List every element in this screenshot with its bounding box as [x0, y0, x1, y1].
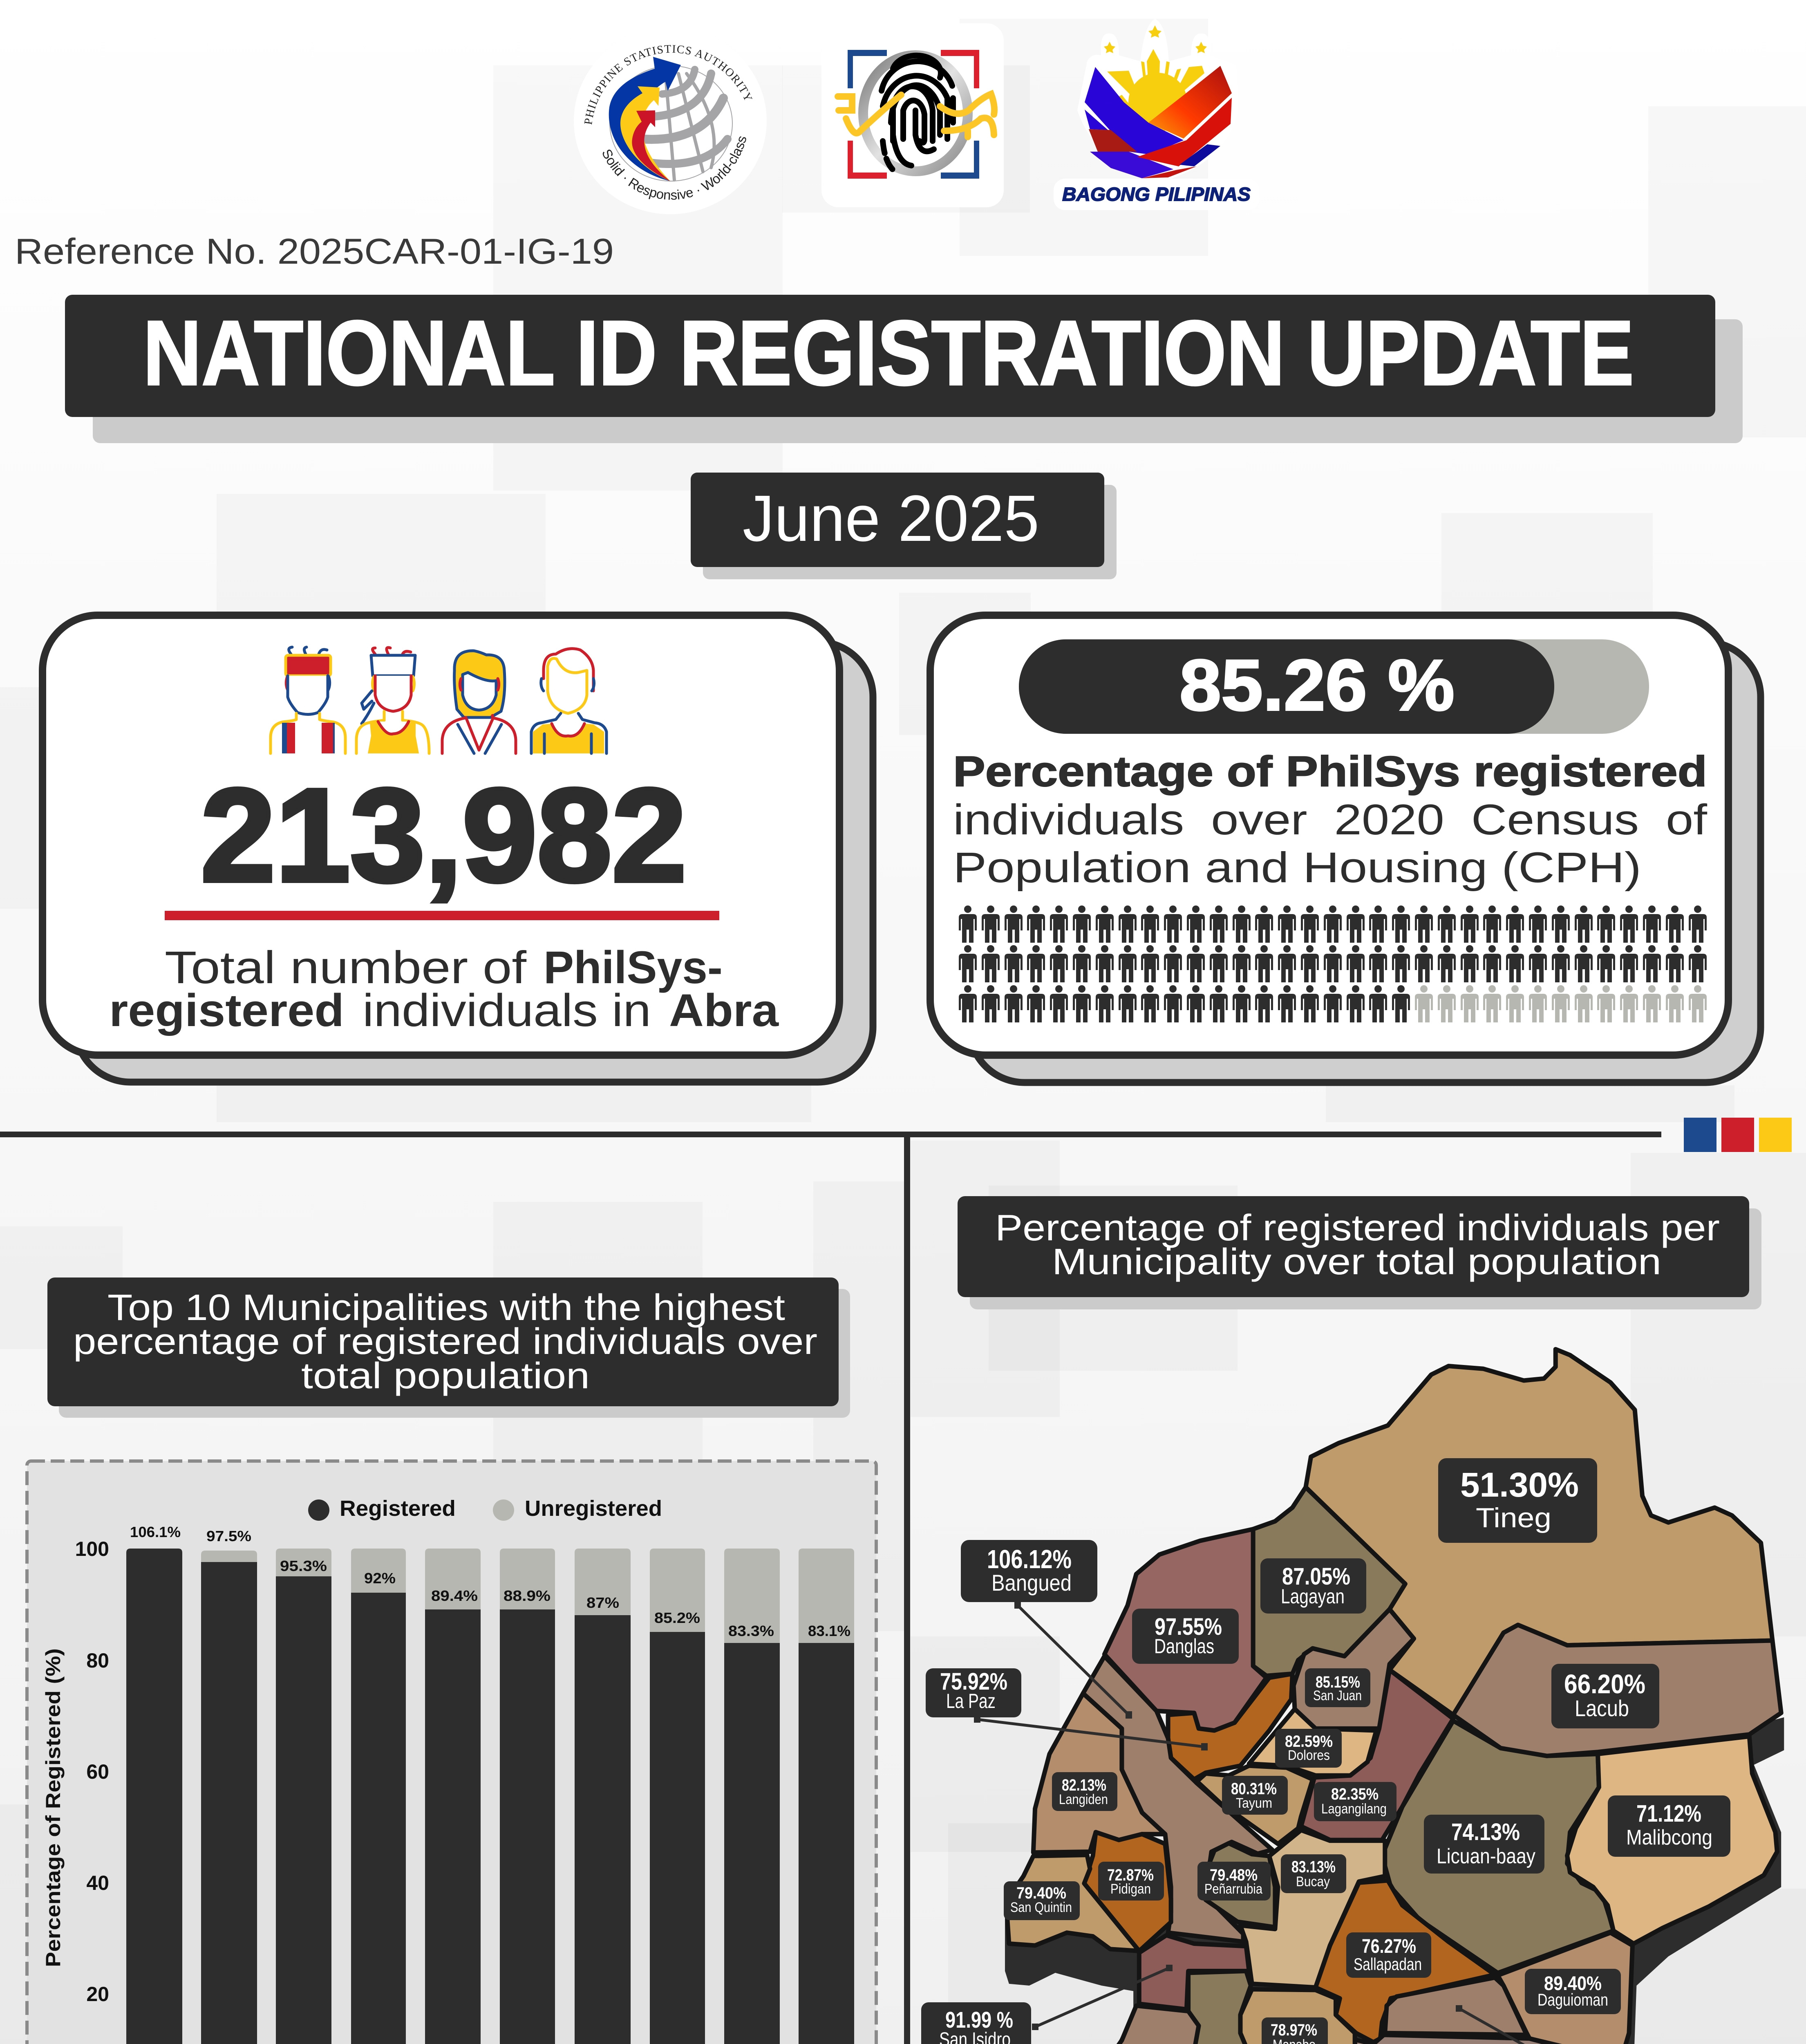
logo: Philippine Statistics Authority	[574, 28, 767, 214]
title banner	[65, 295, 1743, 443]
label: Daguioman: 89.40%	[1544, 1973, 1602, 1995]
southern municipalities	[1006, 1830, 1632, 2044]
label: Manabo: 78.97%	[1271, 2021, 1317, 2039]
region: Bucloc	[1385, 1978, 1526, 2035]
label: Manabo	[1262, 2017, 1328, 2044]
label: Licuan-Baay: Licuan-baay	[1437, 1845, 1535, 1868]
region: Sallapadan	[1316, 1880, 1495, 2042]
label: Daguioman	[1525, 1969, 1621, 2014]
label: Tineg: 51.30%	[1460, 1466, 1579, 1504]
panel: percentage registered	[930, 615, 1761, 1083]
region: Peñarrubia	[1206, 1843, 1275, 1927]
label: San Juan: San Juan	[1313, 1688, 1362, 1703]
label: Tayum	[1222, 1776, 1288, 1815]
label: Langiden	[1052, 1772, 1117, 1811]
map: Abra municipalities	[1005, 1349, 1784, 2044]
panel: total registered	[43, 615, 873, 1082]
region: Villaviciosa	[1154, 1971, 1255, 2044]
caption: total number	[109, 942, 779, 1036]
y axis	[75, 1537, 109, 2044]
label: San Quintin: 79.40%	[1016, 1884, 1066, 1902]
label: Sallapadan	[1346, 1932, 1431, 1978]
label: Dolores	[1275, 1729, 1342, 1768]
label: Malibcong: 71.12%	[1636, 1800, 1701, 1827]
label: Sallapadan: 76.27%	[1362, 1936, 1416, 1957]
logo: PhilSys fingerprint	[821, 23, 1004, 207]
caption: total number: Total number of	[165, 942, 527, 993]
label: Lacub: 66.20%	[1564, 1669, 1645, 1699]
region: Bucay	[1240, 1830, 1385, 1988]
progress pill: 85.26 %	[1019, 639, 1649, 734]
label: Licuan-Baay	[1424, 1815, 1544, 1874]
region: Lacub	[1453, 1625, 1781, 1756]
title banner: NATIONAL ID REGISTRATION UPDATE	[143, 301, 1634, 404]
value labels: 85.2%	[654, 1609, 700, 1626]
statistic: 213,982: 213,982	[201, 761, 687, 909]
date badge	[691, 473, 1117, 579]
label: Danglas	[1132, 1609, 1239, 1664]
logo: Philippine Statistics Authority: PHILIPPINE STATISTICS AUTHORITY	[582, 43, 755, 126]
label: Bangued: Bangued	[991, 1570, 1072, 1596]
heading: percentage per municipality	[958, 1196, 1761, 1309]
value labels: 106.1%	[130, 1524, 181, 1540]
label: Peñarrubia	[1197, 1862, 1271, 1901]
label: San Isidro: 91.99 %	[945, 2007, 1013, 2033]
description text: Percentage of PhilSys registered	[953, 748, 1707, 796]
label: Pidigan: Pidigan	[1110, 1881, 1151, 1897]
label: Bangued: 106.12%	[987, 1544, 1072, 1574]
label: San Isidro	[921, 2002, 1031, 2044]
caption: total number: Abra	[669, 985, 779, 1036]
heading: percentage per municipality: Percentage of registered individuals per	[995, 1208, 1720, 1248]
description text	[953, 748, 1708, 892]
value labels: 97.5%	[206, 1528, 251, 1544]
heading: top 10 municipalities	[47, 1278, 850, 1418]
description text: Population and Housing (CPH)	[953, 844, 1641, 892]
color squares	[1684, 1118, 1792, 1152]
label: Tayum: 80.31%	[1231, 1780, 1277, 1798]
y axis: 20	[86, 1983, 109, 2006]
label: Langiden: 82.13%	[1062, 1776, 1106, 1794]
region: San Quintin	[1006, 1855, 1139, 1951]
value labels	[130, 1524, 850, 1639]
bars	[126, 1549, 854, 2044]
value labels: 92%	[364, 1570, 396, 1587]
map shadow	[1005, 1717, 1784, 2044]
region: Langiden	[1033, 1693, 1165, 1853]
label: Sallapadan: Sallapadan	[1354, 1954, 1422, 1974]
caption: total number: individuals in	[363, 985, 651, 1036]
region: San Isidro	[1139, 1935, 1249, 2009]
label: Bucay: Bucay	[1296, 1874, 1330, 1889]
region: Danglas	[1104, 1529, 1267, 1730]
icon: four people in traditional dress	[271, 647, 606, 753]
region: Pilar	[1084, 2006, 1199, 2044]
y axis: 80	[86, 1649, 109, 1672]
label: San Juan	[1305, 1668, 1370, 1707]
label: Lagangilang: Lagangilang	[1321, 1801, 1387, 1817]
date badge: June 2025	[743, 482, 1039, 555]
region: Licuan-Baay	[1382, 1721, 1614, 1973]
label: Lagayan	[1260, 1558, 1366, 1614]
region: Bangued	[1083, 1656, 1272, 1942]
region: La Paz	[1168, 1674, 1292, 1780]
label: Lagayan: Lagayan	[1281, 1585, 1345, 1608]
value labels: 87%	[586, 1594, 619, 1611]
region: Pidigan	[1084, 1832, 1171, 1951]
stacked bar chart	[27, 1461, 876, 2044]
label: Malibcong	[1608, 1795, 1730, 1857]
heading: top 10 municipalities: Top 10 Municipalities with the highest	[107, 1287, 785, 1328]
value labels: 95.3%	[280, 1558, 327, 1574]
label: Bangued	[961, 1540, 1097, 1602]
heading: top 10 municipalities: percentage of registered individuals over	[73, 1321, 817, 1362]
label: San Juan: 85.15%	[1316, 1673, 1360, 1691]
label: Daguioman: Daguioman	[1537, 1990, 1608, 2009]
caption: total number: registered	[109, 985, 344, 1036]
label: La Paz: La Paz	[946, 1690, 996, 1712]
label: Dolores: 82.59%	[1285, 1732, 1333, 1750]
label: Pidigan: 72.87%	[1107, 1866, 1154, 1884]
label: Lagayan: 87.05%	[1282, 1563, 1350, 1590]
label: Danglas: 97.55%	[1155, 1614, 1222, 1640]
region: Dolores	[1249, 1709, 1376, 1775]
leader lines	[974, 1601, 1677, 2044]
description text: individuals over 2020 Census of	[953, 796, 1708, 844]
label: Lagangilang: 82.35%	[1331, 1785, 1379, 1803]
label: Langiden: Langiden	[1059, 1792, 1108, 1807]
chart legend	[308, 1496, 662, 1521]
label: Bucay: 83.13%	[1291, 1858, 1336, 1876]
reference number: Reference No. 2025CAR-01-IG-19	[15, 231, 614, 271]
logo: Bagong Pilipinas: BAGONG PILIPINAS	[1062, 184, 1251, 205]
region: Lagangilang	[1301, 1670, 1453, 1840]
region: San Juan	[1294, 1609, 1414, 1728]
progress pill: 85.26 %: 85.26 %	[1179, 645, 1455, 726]
label: Lacub: Lacub	[1575, 1695, 1629, 1721]
region: Malibcong	[1567, 1736, 1777, 1943]
value labels: 83.3%	[728, 1623, 774, 1639]
label: Peñarrubia: Peñarrubia	[1204, 1881, 1262, 1897]
label: Peñarrubia: 79.48%	[1210, 1866, 1258, 1884]
label: Malibcong: Malibcong	[1626, 1826, 1712, 1849]
region: Lagayan	[1253, 1487, 1405, 1676]
value labels: 89.4%	[431, 1587, 478, 1604]
label: Tineg	[1438, 1458, 1597, 1543]
pictogram: 100 people rows	[959, 905, 1707, 1022]
label: La Paz	[926, 1668, 1021, 1717]
y axis: 100	[75, 1537, 109, 1560]
label: Bucay	[1281, 1854, 1346, 1893]
value labels: 88.9%	[504, 1587, 551, 1604]
label: Tineg: Tineg	[1476, 1502, 1551, 1533]
heading: top 10 municipalities: total population	[301, 1356, 590, 1396]
region: Tineg	[1306, 1349, 1772, 1715]
logo: Philippine Statistics Authority: Solid · Responsive · World-class	[599, 134, 750, 203]
label: Danglas: Danglas	[1154, 1635, 1214, 1658]
region: Tayum	[1197, 1766, 1313, 1844]
value labels: 83.1%	[808, 1623, 850, 1639]
label: Lagangilang	[1314, 1782, 1396, 1821]
label: Lacub	[1551, 1664, 1659, 1728]
red underline	[165, 911, 719, 920]
label: La Paz: 75.92%	[940, 1668, 1007, 1695]
chart legend: Unregistered	[525, 1496, 662, 1521]
caption: total number: PhilSys-	[544, 942, 723, 993]
y axis: 40	[86, 1871, 109, 1894]
label: Pidigan	[1098, 1862, 1164, 1901]
region: Daguioman	[1498, 1933, 1632, 2044]
heading: percentage per municipality: Municipality over total population	[1052, 1242, 1661, 1282]
region: Manabo	[1240, 1989, 1355, 2044]
y axis: 60	[86, 1760, 109, 1783]
label: Licuan-Baay: 74.13%	[1451, 1819, 1520, 1845]
region: Boliney	[1355, 2035, 1619, 2044]
label: San Quintin: San Quintin	[1010, 1900, 1072, 1915]
y axis title: Percentage of Registered (%)	[42, 1648, 65, 1967]
label: Tayum: Tayum	[1236, 1795, 1272, 1811]
label: San Quintin	[1004, 1881, 1080, 1920]
chart legend: Registered	[340, 1496, 456, 1521]
label: Dolores: Dolores	[1288, 1748, 1330, 1763]
logo: Bagong Pilipinas	[1054, 19, 1259, 210]
northern municipalities	[1033, 1349, 1781, 1973]
